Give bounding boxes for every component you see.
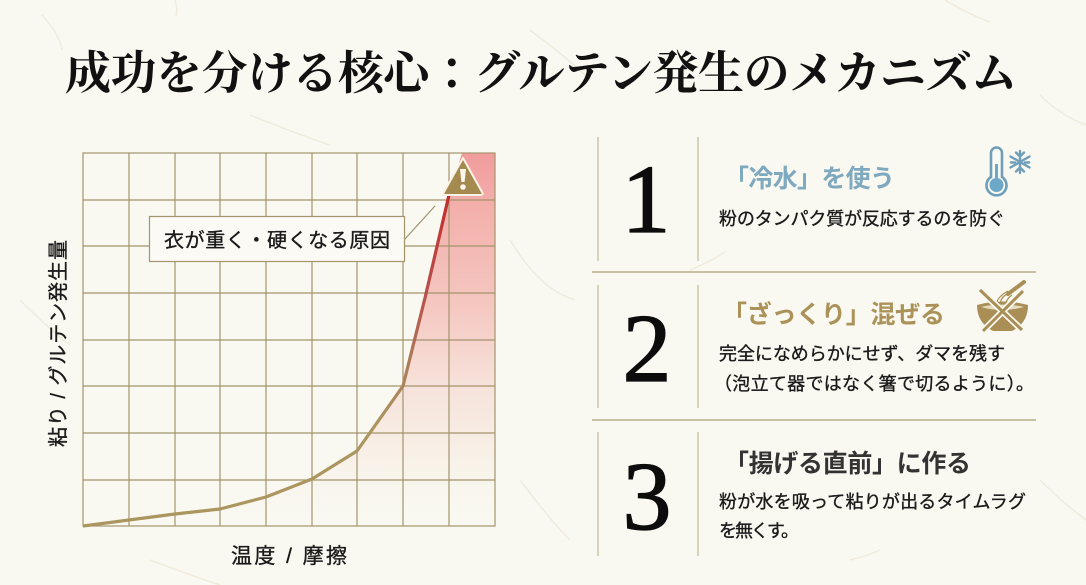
number 2: 2 <box>622 295 672 403</box>
icon: thermometer and snowflake <box>986 148 1030 195</box>
y axis label: 粘り / グルテン発生量 <box>47 240 70 447</box>
number 1: 1 <box>622 146 670 254</box>
step 2 description: （泡立て器ではなく箸で切るように）。 <box>714 374 1034 394</box>
step 3 <box>622 443 1026 551</box>
curve line <box>83 195 449 526</box>
callout: 衣が重く・硬くなる原因 <box>164 229 390 252</box>
title: 成功を分ける核心：グルテン発生のメカニズム <box>65 48 1017 99</box>
step 1 heading: 「冷水」を使う <box>724 165 895 193</box>
danger zone shading <box>175 153 495 526</box>
callout leader line <box>404 206 435 240</box>
step 3 description <box>719 492 1026 541</box>
step 1 <box>622 146 1030 254</box>
number 3: 3 <box>622 443 672 551</box>
icon: warning triangle <box>443 158 483 195</box>
callout <box>150 216 404 262</box>
step 2 description: 完全になめらかにせず、ダマを残す <box>719 344 1005 364</box>
step 1 description: 粉のタンパク質が反応するのを防ぐ <box>719 209 1005 229</box>
step 3 heading: 「揚げる直前」に作る <box>724 450 971 478</box>
grid <box>83 153 495 526</box>
step 2 description <box>714 344 1034 394</box>
step 2 <box>622 282 1034 403</box>
panel dividers <box>592 137 1036 556</box>
x axis label: 温度 / 摩擦 <box>231 545 347 568</box>
icon: crossed-out bowl and whisk <box>977 282 1028 331</box>
step 3 description: を無くす。 <box>719 521 799 541</box>
chart: gluten curve <box>47 153 495 568</box>
step 3 description: 粉が水を吸って粘りが出るタイムラグ <box>719 492 1026 512</box>
step 2 heading: 「ざっくり」混ぜる <box>722 300 945 329</box>
